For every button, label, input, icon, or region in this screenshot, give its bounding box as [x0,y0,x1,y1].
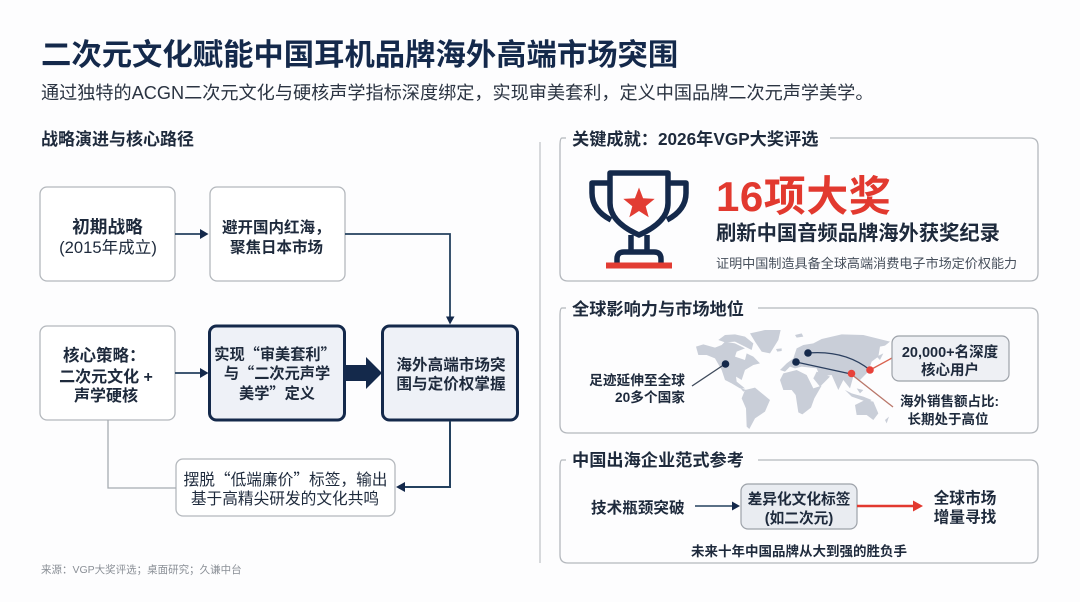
box: aesthetic arbitrage [210,326,344,420]
arrow: avoid to breakthrough [345,234,454,324]
step: differentiated culture label: 差异化文化标签 [748,490,851,508]
step: differentiated culture label [741,484,857,529]
step: global market: 全球市场 [934,488,997,508]
box: avoid red ocean: 避开国内红海， [222,218,331,237]
box: overseas breakthrough [382,326,518,420]
achievement note: 证明中国制造具备全球高端消费电子市场定价权能力 [716,255,1017,271]
heading: enterprise paradigm: 中国出海企业范式参考 [572,450,744,470]
world map [696,330,890,429]
arrow: breakthrough to label [396,421,450,492]
box: aesthetic arbitrage: 与“二次元声学 [224,362,330,384]
map markers [722,349,874,377]
callout: core users: 20,000+名深度 [902,343,999,361]
icon: trophy [592,173,686,268]
panel: global influence [560,299,1038,433]
paradigm conclusion: 未来十年中国品牌从大到强的胜负手 [691,543,907,559]
title: 二次元文化赋能中国耳机品牌海外高端市场突围 [41,38,678,72]
box: avoid red ocean [210,187,345,281]
box: aesthetic arbitrage: 美学”定义 [239,382,315,404]
step: differentiated culture label: (如二次元) [765,509,833,527]
label: footprint: 足迹延伸至全球 [589,372,685,388]
box: escape low-end label: 基于高精尖研发的文化共鸣 [191,490,379,508]
box: avoid red ocean: 聚焦日本市场 [230,238,323,257]
subtitle: 通过独特的ACGN二次元文化与硬核声学指标深度绑定，实现审美套利，定义中国品牌二次元声学美学。 [41,83,873,103]
box: core strategy: 核心策略： [63,345,146,365]
step: global market: 增量寻找 [934,508,997,526]
heading: global influence: 全球影响力与市场地位 [572,299,744,319]
arrow: label to market [857,500,923,512]
heading: strategy path: 战略演进与核心路径 [41,129,194,149]
box: core strategy [40,326,175,420]
box: aesthetic arbitrage: 实现“审美套利” [214,343,336,365]
label: overseas sales share [900,393,999,427]
box: early strategy: 初期战略 [72,216,143,237]
step: tech breakthrough: 技术瓶颈突破 [591,498,685,517]
panel: enterprise paradigm [560,450,1038,563]
heading: key achievement: 关键成就：2026年VGP大奖评选 [572,129,818,149]
arrow: core to arbitrage [175,368,208,378]
box: escape low-end label [176,459,395,516]
box: core strategy: 二次元文化 + [59,367,153,386]
callout: core users: 核心用户 [921,361,979,379]
arrow: tech to label [695,502,740,510]
achievement headline: 刷新中国音频品牌海外获奖纪录 [716,221,1000,245]
source note: 来源：VGP大奖评选；桌面研究；久谦中台 [41,563,242,576]
arrow: arbitrage to breakthrough [345,357,382,389]
callout: core users [892,336,1009,381]
label: overseas sales share: 海外销售额占比: [900,393,999,409]
big number: 16项大奖 [716,173,891,220]
connector: core to label [108,420,176,488]
box: early strategy: (2015年成立) [59,238,157,257]
box: overseas breakthrough: 围与定价权掌握 [396,374,506,393]
box: escape low-end label: 摆脱“低端廉价”标签，输出 [184,467,387,490]
arrow: early to avoid [175,229,208,239]
box: overseas breakthrough: 海外高端市场突 [396,355,506,374]
box: early strategy [40,187,175,281]
map connection lines [692,353,893,407]
flowchart: strategy path [40,187,518,516]
box: core strategy: 声学硬核 [74,386,138,405]
panel: key achievement [560,129,1038,281]
label: footprint: 20多个国家 [615,389,685,405]
label: overseas sales share: 长期处于高位 [908,411,988,427]
step: global market [934,488,997,526]
label: footprint [589,372,685,405]
